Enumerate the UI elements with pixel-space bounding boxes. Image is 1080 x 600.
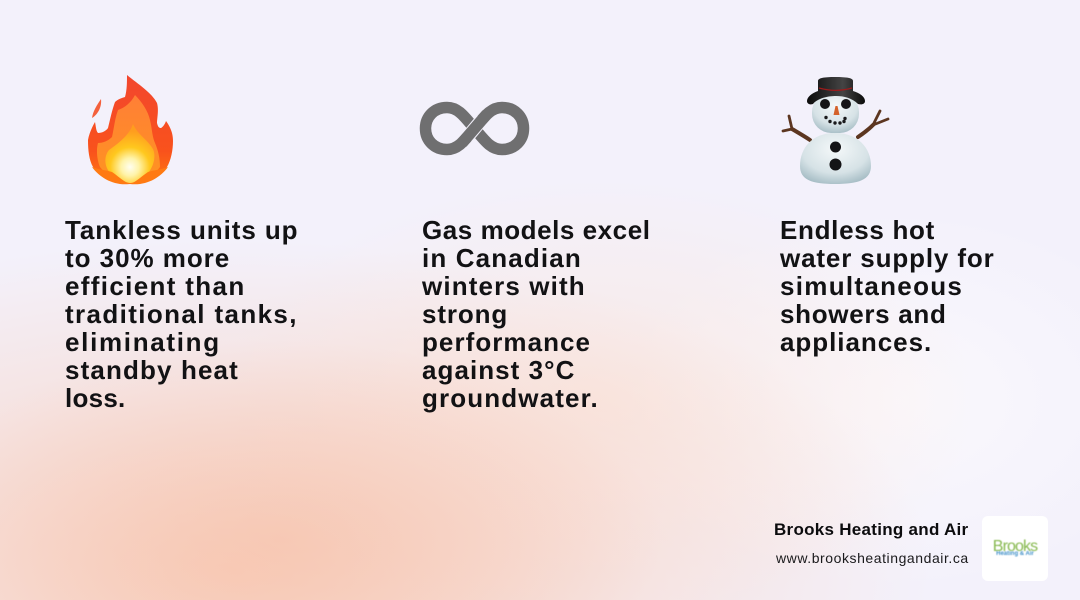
text: efficiency: loss.: [65, 383, 126, 413]
company name: Brooks Heating and Air: [774, 520, 968, 539]
logo tagline: Heating & Air: [996, 551, 1034, 557]
website: www.brooksheatingandair.ca: [776, 550, 969, 566]
text: efficiency: to 30% more: [65, 243, 230, 273]
text: endless hot water: water supply for: [780, 243, 995, 273]
text: efficiency: [65, 215, 298, 413]
text: gas models: Gas models excel: [422, 215, 650, 245]
text: gas models: [422, 215, 650, 413]
text: efficiency: efficient than: [65, 271, 246, 301]
icon: fire: [88, 75, 173, 184]
text: efficiency: eliminating: [65, 327, 221, 357]
icon: snowman: [782, 77, 890, 184]
text: gas models: performance: [422, 327, 591, 357]
text: efficiency: traditional tanks,: [65, 299, 298, 329]
text: endless hot water: simultaneous: [780, 271, 963, 301]
icon: infinity symbol: [420, 102, 530, 156]
text: gas models: against 3°C: [422, 355, 575, 385]
text: gas models: winters with: [422, 271, 586, 301]
text: efficiency: Tankless units up: [65, 215, 298, 245]
text: endless hot water: showers and: [780, 299, 947, 329]
logo wordmark: Brooks: [993, 538, 1037, 555]
text: endless hot water: Endless hot: [780, 215, 935, 245]
text: gas models: in Canadian: [422, 243, 582, 273]
logo card: [982, 516, 1048, 581]
text: efficiency: standby heat: [65, 355, 239, 385]
text: endless hot water: [780, 215, 995, 357]
text: gas models: strong: [422, 299, 508, 329]
text: endless hot water: appliances.: [780, 327, 932, 357]
text: gas models: groundwater.: [422, 383, 599, 413]
